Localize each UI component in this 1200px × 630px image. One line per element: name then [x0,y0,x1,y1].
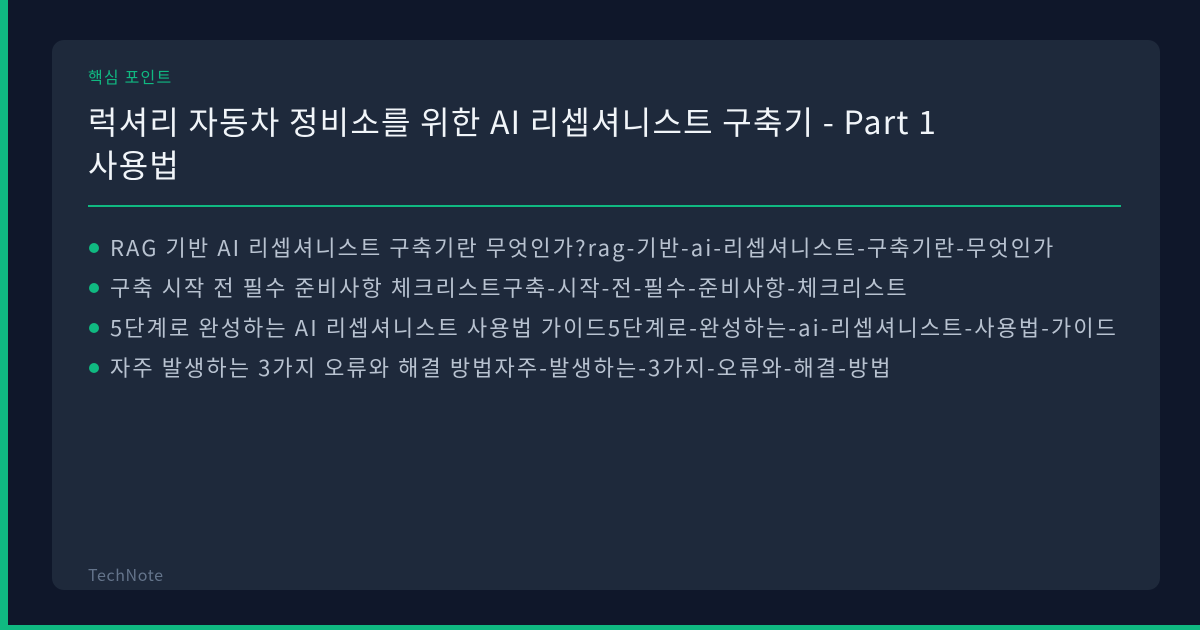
tag label: 핵심 포인트 [88,64,172,88]
bullet list: RAG 기반 AI 리셉셔니스트 구축기란 무엇인가?rag-기반-ai-리셉셔니스트-구축기란-무엇인가 [110,231,1055,263]
bullet list [89,231,1118,383]
bullet list: 구축 시작 전 필수 준비사항 체크리스트구축-시작-전-필수-준비사항-체크리스트 [110,271,909,303]
title: 럭셔리 자동차 정비소를 위한 AI 리셉셔니스트 구축기 - Part 1 [88,98,937,144]
footer brand: TechNote [88,562,164,586]
bullet list: 자주 발생하는 3가지 오류와 해결 방법자주-발생하는-3가지-오류와-해결-방법 [110,351,893,383]
title [88,98,937,187]
bullet list: 5단계로 완성하는 AI 리셉셔니스트 사용법 가이드5단계로-완성하는-ai-리셉셔니스트-사용법-가이드 [110,311,1118,343]
title: 사용법 [88,141,180,187]
